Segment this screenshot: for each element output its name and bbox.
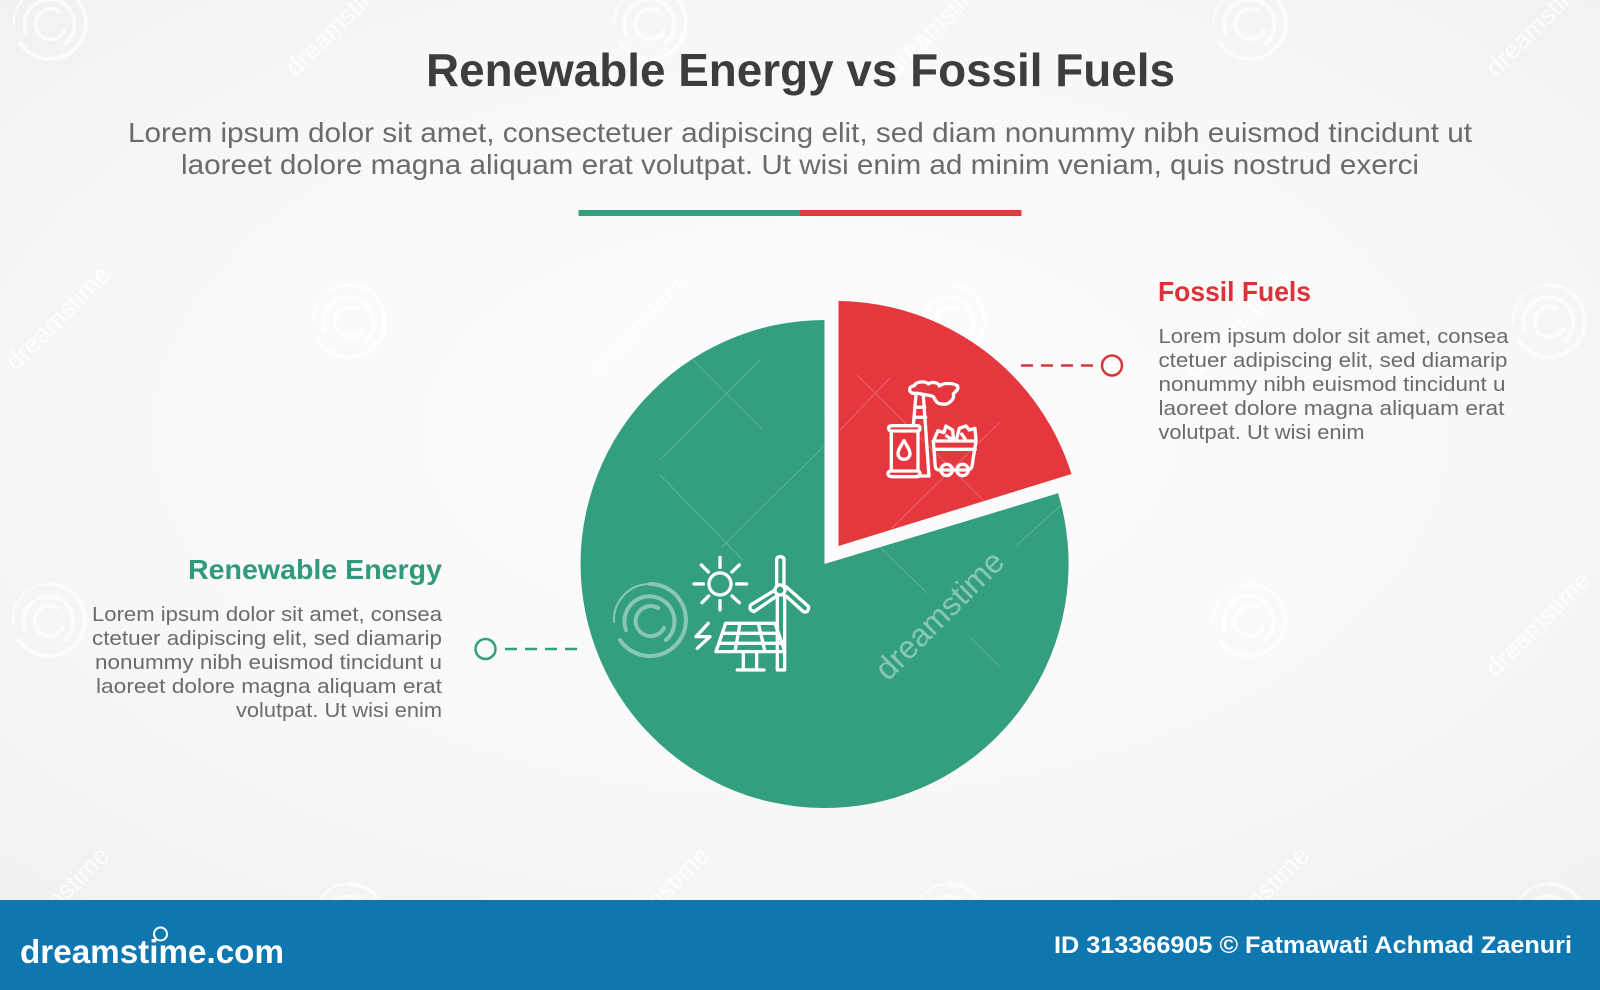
- watermark pattern: dreamstime: [0, 840, 115, 957]
- subtitle text: Lorem ipsum dolor sit amet, consectetuer adipiscing elit, sed diam nonummy nibh euismod tincidunt ut: [128, 117, 1472, 148]
- watermark pattern: dreamstime: [0, 259, 116, 376]
- heading: fossil fuels: Fossil Fuels: [1158, 276, 1311, 307]
- watermark lines on pie: [660, 360, 1061, 667]
- divider: two-colour bar: [578, 210, 1022, 216]
- panel: [716, 623, 785, 652]
- watermark on pie: dreamstime: [867, 543, 1011, 687]
- callout: fossil fuels connector: [1021, 356, 1122, 376]
- body text: renewable energy: [92, 603, 443, 722]
- coal cart: [933, 441, 976, 470]
- text block: renewable energy: [92, 554, 443, 722]
- body text: renewable energy: nonummy nibh euismod tincidunt u: [95, 651, 442, 674]
- turbine: [777, 557, 784, 584]
- footer bar: [0, 900, 1600, 990]
- text block: fossil fuels: [1158, 276, 1509, 444]
- watermark pattern: dreamstime: [1198, 840, 1315, 957]
- watermark pattern: dreamstime: [579, 265, 696, 382]
- body text: fossil fuels: volutpat. Ut wisi enim: [1158, 421, 1364, 444]
- body text: fossil fuels: Lorem ipsum dolor sit amet, consea: [1158, 325, 1509, 348]
- smoke: [910, 382, 958, 404]
- chimney: [913, 395, 929, 476]
- barrel: [888, 426, 920, 477]
- body text: fossil fuels: [1158, 325, 1509, 444]
- watermark pattern: dreamstime: [1479, 565, 1596, 682]
- body text: renewable energy: Lorem ipsum dolor sit amet, consea: [92, 603, 443, 626]
- pie slice: renewable energy: [581, 320, 1069, 808]
- watermark pattern: dreamstime: [598, 840, 715, 957]
- icon: factory, barrel and coal cart: [888, 382, 976, 477]
- title: Renewable Energy vs Fossil Fuels: [426, 44, 1175, 96]
- body text: renewable energy: volutpat. Ut wisi enim: [236, 699, 442, 722]
- body text: renewable energy: laoreet dolore magna aliquam erat: [96, 675, 442, 698]
- bolt: [696, 623, 710, 648]
- callout: renewable energy connector: [476, 639, 578, 659]
- footer credit: ID 313366905 © Fatmawati Achmad Zaenuri: [1054, 932, 1572, 959]
- body text: fossil fuels: laoreet dolore magna aliquam erat: [1158, 397, 1505, 420]
- icon: sun, wind turbine and solar panel: [694, 557, 809, 670]
- subtitle text: [128, 117, 1472, 180]
- body text: fossil fuels: nonummy nibh euismod tincidunt u: [1158, 373, 1506, 396]
- heading: renewable energy: Renewable Energy: [188, 554, 442, 585]
- subtitle text: laoreet dolore magna aliquam erat volutpat. Ut wisi enim ad minim veniam, quis nostrud exerci: [181, 149, 1419, 180]
- sun: [709, 573, 731, 595]
- footer logo: dreamstime.com: [20, 933, 284, 970]
- pie chart: [581, 301, 1072, 808]
- watermark on pie: [614, 543, 1011, 687]
- watermark pattern: dreamstime: [1179, 265, 1296, 382]
- pie slice: fossil fuels: [838, 301, 1072, 546]
- body text: renewable energy: ctetuer adipiscing elit, sed diamarip: [92, 627, 442, 650]
- body text: fossil fuels: ctetuer adipiscing elit, sed diamarip: [1158, 349, 1508, 372]
